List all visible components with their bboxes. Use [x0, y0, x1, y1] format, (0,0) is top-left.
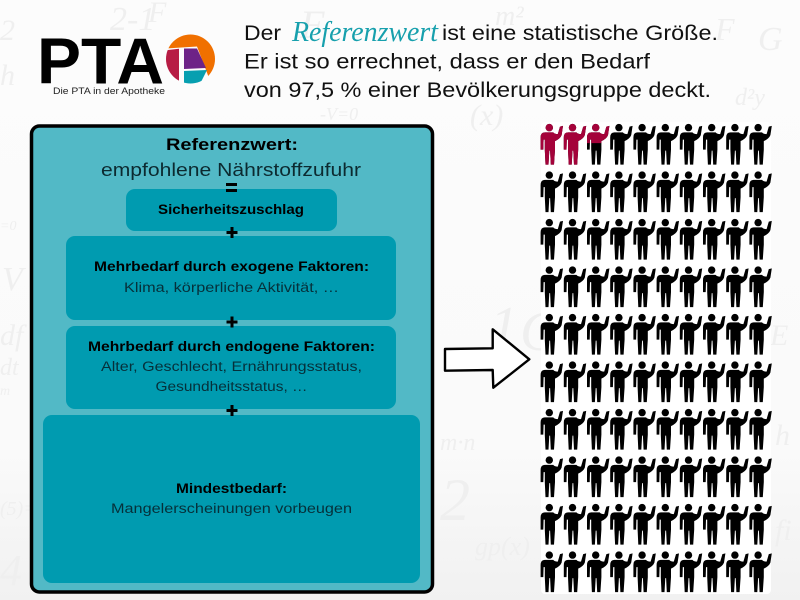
box: Mindestbedarf — [43, 415, 420, 583]
plus sign — [226, 405, 238, 416]
text: -V=0 — [320, 104, 358, 124]
text: E — [769, 319, 788, 352]
panel heading — [101, 135, 361, 180]
text: V — [2, 261, 27, 298]
text: =0 — [0, 219, 16, 234]
intro text: Er ist so errechnet, dass er den Bedarf — [244, 50, 650, 74]
equals sign — [226, 183, 237, 192]
intro text: ist eine statistische Größe. — [442, 22, 718, 45]
logo wordmark: PTA — [37, 24, 164, 98]
text: h — [0, 59, 15, 92]
logo: PTA — [41, 34, 215, 96]
box: exogene Faktoren: Klima, körperliche Aktivität, … — [124, 280, 339, 295]
panel: Referenzwert composition — [32, 126, 432, 592]
box: exogene Faktoren — [66, 236, 396, 320]
highlighted figures: 2.5 of 100 — [541, 124, 609, 165]
box: endogene Faktoren: Mehrbedarf durch endogene Faktoren: — [88, 339, 375, 354]
text: F — [714, 11, 735, 47]
text: m — [0, 384, 10, 399]
text: 2 — [0, 14, 15, 47]
intro text — [244, 17, 718, 102]
text: (5)= — [0, 498, 37, 520]
text: 2 — [440, 467, 470, 533]
text: F — [299, 2, 325, 47]
plus sign — [226, 227, 238, 238]
box: Mindestbedarf: Mindestbedarf: — [176, 481, 287, 496]
plus sign — [226, 316, 238, 328]
intro text: von 97,5 % einer Bevölkerungsgruppe deckt. — [244, 79, 711, 102]
box: exogene Faktoren: Mehrbedarf durch exogene Faktoren: — [94, 259, 369, 274]
box: Sicherheitszuschlag — [126, 189, 337, 231]
text: 2-1 — [110, 1, 155, 38]
text: gp(x) — [475, 532, 530, 561]
text: m² — [495, 1, 524, 32]
panel heading: empfohlene Nährstoffzufuhr — [101, 160, 361, 180]
text: dt — [0, 355, 20, 381]
text: h — [775, 419, 790, 452]
logo tagline: Die PTA in der Apotheke — [53, 86, 165, 96]
people grid: 100 figures, 2.5 highlighted — [541, 124, 772, 592]
panel heading: Referenzwert: — [166, 135, 298, 154]
text: d²y — [735, 85, 765, 111]
text: df — [0, 319, 27, 352]
box: Sicherheitszuschlag: Sicherheitszuschlag — [158, 202, 304, 217]
logo emblem — [166, 34, 215, 84]
box: endogene Faktoren: Gesundheitsstatus, … — [156, 379, 308, 394]
arrow — [445, 329, 529, 388]
box: Mindestbedarf: Mangelerscheinungen vorbeugen — [111, 501, 352, 516]
text: m·n — [440, 430, 475, 456]
text: fi — [775, 514, 792, 547]
text: 1 — [490, 296, 518, 358]
text: 4 — [0, 546, 22, 595]
white background of people grid — [541, 122, 771, 594]
box: endogene Faktoren: Alter, Geschlecht, Ernährungsstatus, — [101, 359, 362, 374]
text: (x) — [470, 99, 503, 132]
highlighted word: Referenzwert: Referenzwert — [291, 17, 439, 48]
intro text: Der — [244, 22, 281, 45]
text: G — [758, 21, 783, 58]
text: C — [520, 301, 558, 363]
box: endogene Faktoren — [66, 326, 396, 409]
